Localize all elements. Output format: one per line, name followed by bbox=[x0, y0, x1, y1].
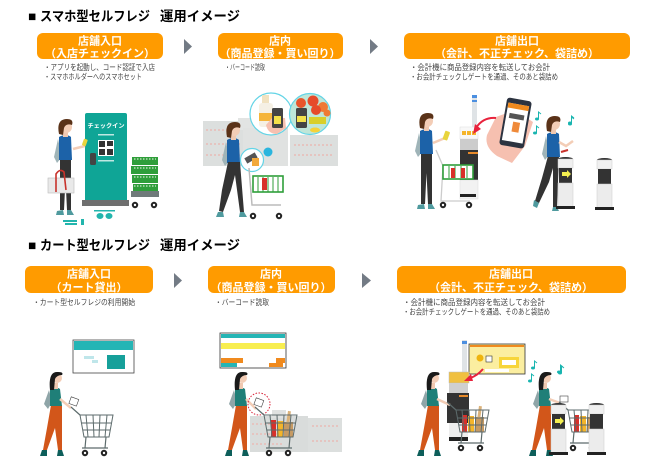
heading: smartphone self-checkout: スマホ型セルフレジ bbox=[40, 9, 150, 24]
text: exit notes: ・会計機に商品登録内容を転送してお会計 bbox=[410, 62, 550, 72]
item list screen bbox=[220, 333, 286, 368]
text: in-store notes: ・バーコード読取 bbox=[225, 62, 265, 72]
step header: in store: （商品登録・買い回り） bbox=[210, 280, 332, 294]
shopper with phone bbox=[415, 113, 450, 209]
scan circle: milk bbox=[250, 93, 292, 135]
illustration: exit checkout scene bbox=[415, 95, 614, 211]
cart with goods bbox=[447, 402, 489, 451]
step header: cart lending: （カート貸出） bbox=[50, 280, 128, 294]
step header: in store: （商品登録・買い回り） bbox=[220, 46, 340, 60]
heading: smartphone self-checkout bbox=[28, 9, 240, 24]
red transfer arrow bbox=[464, 369, 483, 381]
store shelves bbox=[250, 410, 342, 452]
heading: cart self-checkout: 運用イメージ bbox=[160, 238, 240, 253]
text: exit notes bbox=[410, 62, 558, 82]
shopper at gate bbox=[529, 372, 568, 456]
step header: store exit bbox=[404, 33, 630, 60]
text: exit notes bbox=[403, 297, 550, 316]
step header: store entrance (check-in): （入店チェックイン） bbox=[45, 47, 155, 60]
arrow bbox=[362, 273, 371, 288]
gates bbox=[556, 157, 614, 210]
text: exit notes: ・お会計チェックしゲートを通過、そのあと袋詰め bbox=[403, 306, 550, 316]
arrow bbox=[370, 39, 378, 54]
illustration: check-in kiosk scene bbox=[48, 113, 159, 225]
gates bbox=[549, 403, 606, 455]
floor footprints bbox=[63, 210, 115, 225]
info dot bbox=[264, 148, 272, 156]
check-in kiosk: チェックイン bbox=[87, 122, 125, 130]
shopper with basket bbox=[48, 119, 88, 215]
text: in-store notes: ・バーコード読取 bbox=[215, 297, 269, 307]
shopper at gate bbox=[533, 116, 573, 211]
step header: in store: 店内 bbox=[260, 266, 282, 280]
illustration: cart lending scene bbox=[40, 340, 134, 456]
illustration: in-store scanning scene bbox=[203, 93, 338, 219]
music notes bbox=[533, 112, 574, 134]
shopper bbox=[216, 122, 248, 217]
music notes bbox=[528, 361, 564, 382]
step header: in store bbox=[208, 266, 335, 294]
checkout machine bbox=[460, 95, 478, 199]
heading: cart self-checkout bbox=[28, 238, 240, 253]
step header: store exit: （会計、不正チェック、袋詰め） bbox=[429, 280, 593, 294]
step header: cart lending bbox=[25, 266, 153, 294]
text: entrance notes: ・スマホホルダーへのスマホセット bbox=[44, 72, 142, 82]
heading: smartphone self-checkout: ■ bbox=[28, 9, 36, 24]
store shelves bbox=[203, 118, 338, 166]
shopping cart with green basket bbox=[249, 168, 283, 219]
step header: store entrance (check-in): 店舗入口 bbox=[78, 34, 122, 48]
text: exit notes: ・会計機に商品登録内容を転送してお会計 bbox=[403, 297, 545, 307]
step header: in store: 店内 bbox=[269, 34, 291, 48]
step header: cart lending: 店舗入口 bbox=[67, 266, 111, 280]
scanner highlight bbox=[248, 393, 270, 415]
step header: store exit bbox=[397, 266, 626, 294]
red transfer arrow bbox=[473, 118, 496, 134]
text: cart notes: ・カート型セルフレジの利用開始 bbox=[33, 297, 135, 307]
checkout machine bbox=[447, 372, 469, 441]
text: entrance notes: ・アプリを起動し、コード認証で入店 bbox=[44, 63, 155, 72]
cart with goods bbox=[559, 402, 601, 451]
illustration: in-store cart scene bbox=[220, 333, 342, 456]
payment screen bbox=[469, 344, 525, 374]
arrow bbox=[174, 273, 182, 288]
stacked green baskets on cart bbox=[131, 157, 159, 208]
shopper bbox=[225, 372, 256, 456]
step header: store exit: 店舗出口 bbox=[489, 266, 533, 280]
shopper bbox=[40, 372, 79, 456]
scan circle: small bbox=[240, 148, 264, 172]
step header: store exit: （会計、不正チェック、袋詰め） bbox=[435, 46, 599, 60]
heading: cart self-checkout: カート型セルフレジ bbox=[40, 238, 150, 253]
cart bbox=[71, 407, 113, 456]
text: entrance notes bbox=[44, 63, 155, 82]
illustration: exit cart scene bbox=[417, 340, 606, 456]
heading: cart self-checkout: ■ bbox=[28, 238, 36, 253]
pole bbox=[462, 340, 467, 372]
shopper bbox=[417, 372, 450, 456]
heading: smartphone self-checkout: 運用イメージ bbox=[160, 9, 240, 24]
arrow bbox=[184, 39, 192, 54]
step header: store entrance (check-in) bbox=[37, 33, 163, 60]
step header: in store bbox=[218, 33, 343, 60]
text: exit notes: ・お会計チェックしゲートを通過、そのあと袋詰め bbox=[410, 72, 558, 82]
start screen bbox=[73, 340, 134, 373]
step header: store exit: 店舗出口 bbox=[495, 34, 539, 48]
scan circle: tomatoes bbox=[290, 94, 330, 134]
cart with goods bbox=[255, 407, 297, 456]
hand holding phone bbox=[486, 97, 533, 163]
cart with green basket bbox=[436, 150, 473, 208]
